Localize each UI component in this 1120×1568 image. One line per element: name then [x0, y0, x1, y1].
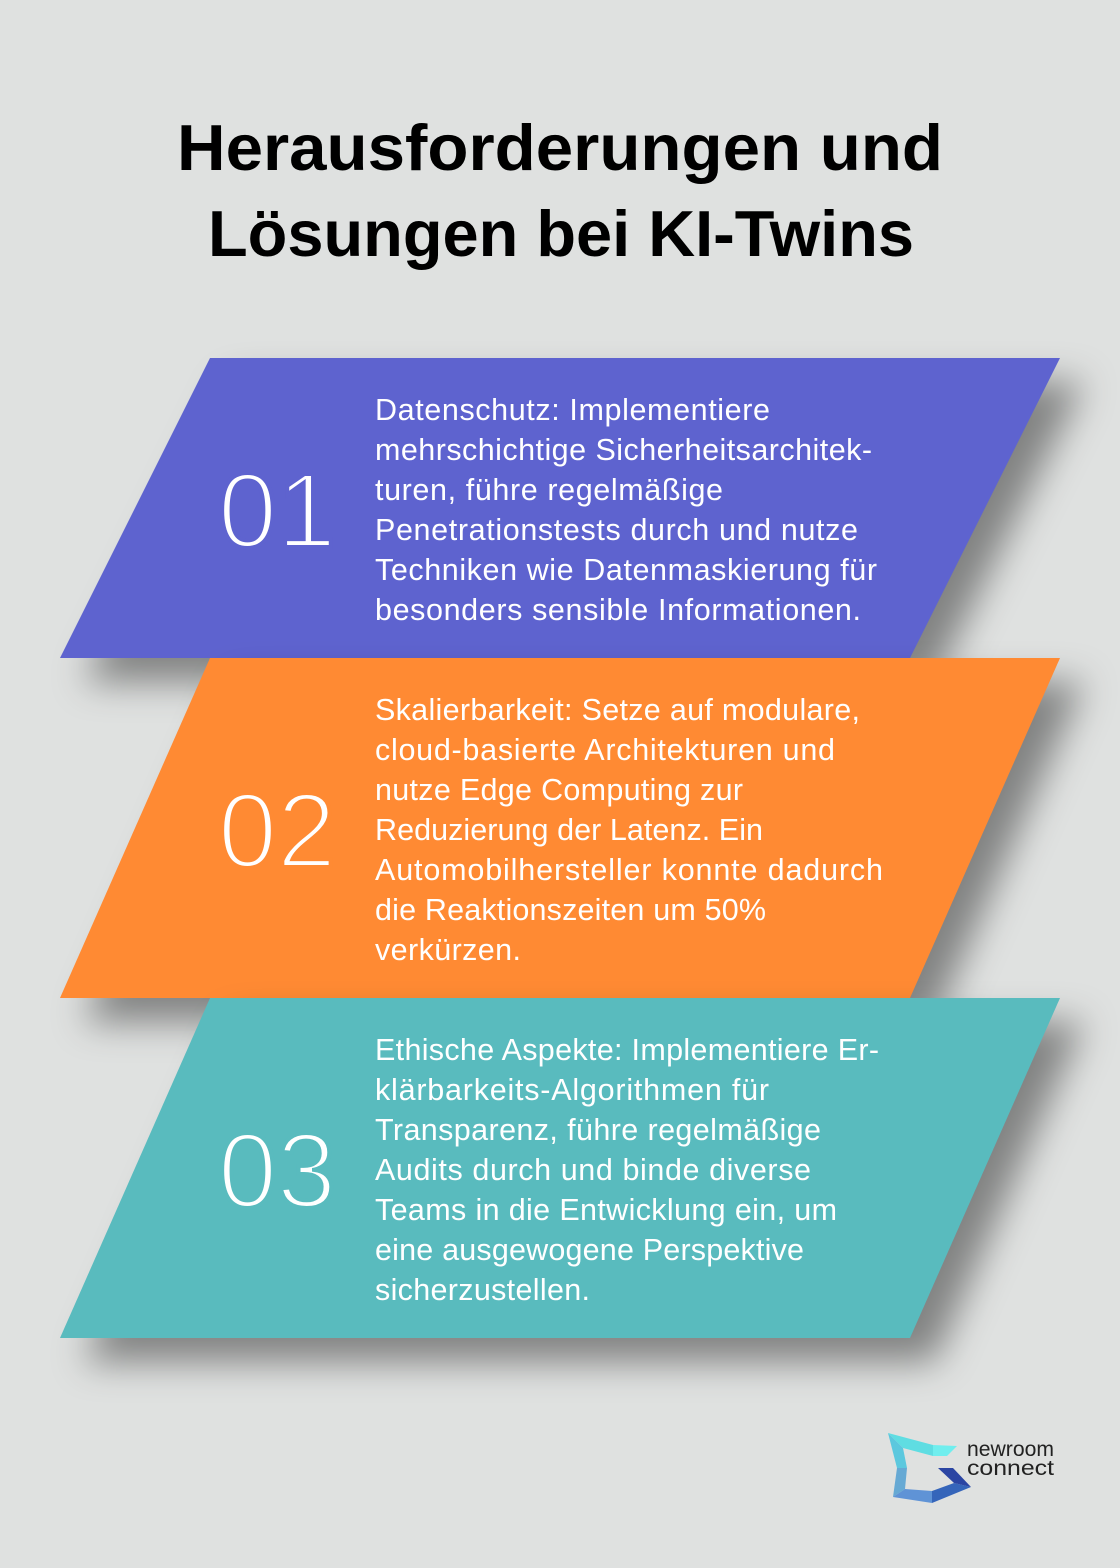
text: Datenschutz: mehrschichtige Sicherheitsarchitek-	[375, 433, 872, 467]
title: Lösungen bei KI-Twins	[208, 198, 914, 270]
number 03: 03	[218, 1112, 336, 1230]
text: Skalierbarkeit	[375, 693, 883, 967]
text: Ethische Aspekte: Teams in die Entwicklung ein, um	[375, 1193, 837, 1227]
panel: 03 Ethische Aspekte	[60, 998, 1084, 1362]
text: Datenschutz	[375, 393, 877, 627]
text: Ethische Aspekte: Audits durch und binde diverse	[375, 1153, 811, 1187]
text: Datenschutz: Techniken wie Datenmaskierung für	[375, 553, 877, 587]
text: Skalierbarkeit: nutze Edge Computing zur	[375, 773, 743, 807]
text: Skalierbarkeit: verkürzen.	[375, 933, 521, 967]
text: Datenschutz: besonders sensible Informationen.	[375, 593, 861, 627]
panel: 01 Datenschutz	[60, 358, 1084, 682]
logo wordmark: newroom	[967, 1438, 1054, 1461]
text: Ethische Aspekte: Ethische Aspekte: Implementiere Er-	[375, 1033, 879, 1067]
logo: newroom connect	[888, 1433, 1054, 1503]
text: Ethische Aspekte: eine ausgewogene Perspektive	[375, 1233, 804, 1267]
text: Skalierbarkeit: Automobilhersteller konnte dadurch	[375, 853, 883, 887]
logo wordmark: connect	[967, 1457, 1054, 1480]
text: Ethische Aspekte	[375, 1033, 879, 1307]
text: Skalierbarkeit: die Reaktionszeiten um 50%	[375, 893, 766, 927]
text: Ethische Aspekte: sicherzustellen.	[375, 1273, 590, 1307]
number 02: 02	[218, 772, 336, 890]
number 01: 01	[218, 452, 336, 570]
text: Ethische Aspekte: klärbarkeits-Algorithmen für	[375, 1073, 769, 1107]
text: Datenschutz: Datenschutz: Implementiere	[375, 393, 770, 427]
text: Datenschutz: Penetrationstests durch und nutze	[375, 513, 858, 547]
text: Skalierbarkeit: Reduzierung der Latenz. Ein	[375, 813, 763, 847]
text: Datenschutz: turen, führe regelmäßige	[375, 473, 723, 507]
title: Herausforderungen und	[177, 112, 943, 184]
text: Skalierbarkeit: cloud-basierte Architekturen und	[375, 733, 835, 767]
title	[177, 112, 943, 270]
logo wordmark	[967, 1438, 1054, 1480]
panel: 02 Skalierbarkeit	[60, 658, 1084, 1022]
icon: logo mark	[888, 1433, 971, 1503]
text: Ethische Aspekte: Transparenz, führe regelmäßige	[375, 1113, 821, 1147]
text: Skalierbarkeit: Skalierbarkeit: Setze auf modulare,	[375, 693, 860, 727]
